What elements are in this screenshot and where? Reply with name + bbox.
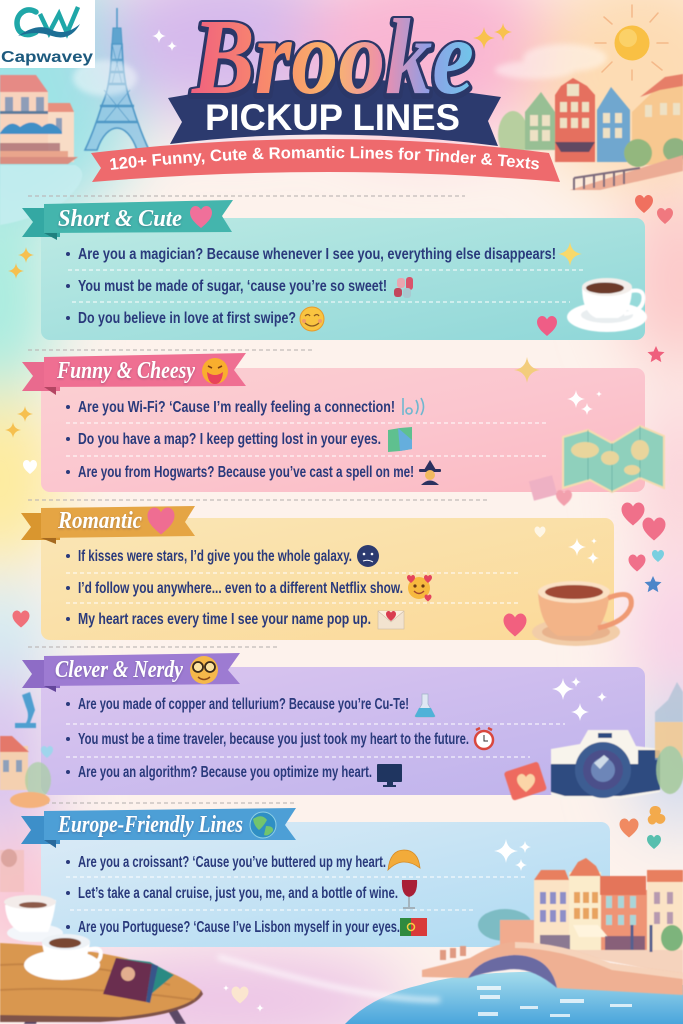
line 3 — [66, 919, 400, 936]
panel: Funny & Cheesy — [22, 353, 645, 492]
icon: sparkles on funny panel — [567, 390, 602, 415]
ribbon: Short & Cute — [22, 200, 233, 240]
title banner: Pickup Lines — [168, 78, 501, 146]
sparkles: romantic panel — [534, 526, 599, 564]
icon: candy — [394, 277, 413, 298]
icon: monitor — [377, 764, 402, 787]
line 1: Are you a croissant? ‘Cause you’ve buttered up my heart. — [78, 854, 386, 871]
icon: small map — [388, 427, 412, 452]
icon: Portugal flag — [400, 918, 427, 936]
line 2: Let’s take a canal cruise, just you, me, and a bottle of wine. — [78, 885, 398, 902]
ribbon: Romantic: Romantic — [57, 508, 142, 534]
line 3 — [66, 764, 372, 781]
decorative hearts and stars on the right edge — [514, 195, 673, 849]
line 1: Are you Wi-Fi? ‘Cause I’m really feeling a connection! — [78, 399, 395, 416]
panel: Romantic — [21, 506, 614, 640]
scenery: stone bridge — [422, 942, 683, 995]
header scenery: pier — [570, 155, 683, 190]
title: Brooke: Brooke — [191, 0, 474, 117]
decorative sparkles and hearts on the left edge — [5, 247, 37, 628]
icon: nerd face — [190, 656, 218, 684]
icon: tea cup on saucer — [532, 581, 631, 646]
icon: sparkles — [558, 242, 582, 266]
header scenery: left building — [0, 75, 82, 225]
panel: Short & Cute — [22, 200, 645, 340]
title banner: Pickup Lines: PICKUP LINES — [205, 97, 460, 138]
scenery: left village and microscope — [0, 692, 53, 892]
icon: sun — [595, 5, 668, 80]
subtitle ribbon — [91, 139, 560, 182]
icon: flask — [415, 694, 435, 717]
icon: face with hearts — [407, 575, 432, 602]
icon: wine glass — [402, 880, 417, 908]
logo: Capwavey — [1, 49, 93, 66]
ribbon: Europe-Friendly Lines: Europe-Friendly Lines — [57, 812, 243, 838]
header scenery: clouds — [73, 44, 607, 96]
logo — [0, 0, 95, 68]
icon: heart photo card — [504, 761, 547, 801]
icon: camera — [551, 730, 660, 799]
line 1 — [66, 854, 386, 871]
line 1: If kisses were stars, I’d give you the whole galaxy. — [78, 548, 352, 565]
line 1 — [66, 696, 409, 713]
icon: cups, passport and café table — [0, 895, 203, 1024]
ribbon: Funny & Cheesy — [22, 353, 246, 395]
icon: folded map — [563, 426, 664, 492]
icon: Eiffel tower — [85, 8, 149, 150]
icon: globe — [250, 812, 276, 838]
line 2: You must be made of sugar, ‘cause you’re so sweet! — [78, 278, 387, 295]
scenery: water — [218, 957, 683, 1024]
line 3: Are you an algorithm? Because you optimize my heart. — [78, 764, 372, 781]
line 2: I’d follow you anywhere... even to a different Netflix show. — [78, 580, 403, 597]
header scenery: colourful houses — [498, 74, 683, 167]
icon: heart — [537, 316, 557, 336]
icon: coffee cup on saucer — [567, 278, 647, 332]
scenery: right village by nerdy panel — [655, 682, 683, 794]
line 3: Are you from Hogwarts? Because you’ve cast a spell on me! — [78, 464, 414, 481]
line 3: Are you Portuguese? ‘Cause I’ve Lisbon myself in your eyes. — [78, 919, 400, 936]
line 1: Are you made of copper and tellurium? Because you’re Cu-Te! — [78, 696, 409, 713]
line 1: Are you a magician? Because whenever I see you, everything else disappears! — [78, 246, 556, 263]
ribbon: Romantic — [21, 506, 195, 544]
ribbon: Clever & Nerdy — [22, 653, 240, 692]
line 2: You must be a time traveler, because you just took my heart to the future. — [78, 731, 469, 748]
line 2 — [66, 885, 398, 902]
icon: postcards and heart — [529, 475, 572, 506]
panel: Clever & Nerdy — [22, 653, 645, 795]
sparkles: header — [152, 23, 512, 116]
sparkles: nerdy panel — [552, 677, 607, 721]
subtitle ribbon: 120+ Funny, Cute & Romantic Lines for Tinder & Texts — [110, 146, 539, 170]
icon: love letter — [378, 611, 404, 629]
ribbon: Europe-Friendly Lines — [21, 808, 296, 848]
icon: wifi signal — [403, 398, 424, 415]
ribbon: Clever & Nerdy: Clever & Nerdy — [55, 657, 183, 683]
icon: navy face — [357, 545, 379, 567]
panel: Europe-Friendly Lines — [21, 808, 610, 947]
decorative heart on the bottom — [223, 985, 264, 1012]
scenery: europe town — [478, 858, 683, 978]
ribbon: Short & Cute: Short & Cute — [58, 206, 182, 232]
sparkles: europe panel — [494, 839, 531, 871]
line 3: Do you believe in love at first swipe? — [78, 310, 296, 327]
icon: hearts beside cup — [504, 614, 526, 636]
section dividers — [28, 196, 488, 803]
icon: croissant — [388, 850, 420, 870]
line 3: My heart races every time I see your name pop up. — [78, 611, 371, 628]
line 2 — [66, 731, 469, 748]
title: Brooke: Brooke — [191, 0, 474, 119]
icon: tongue-out face — [202, 358, 228, 384]
icon: smiling face — [300, 307, 324, 331]
icon: wizard — [419, 460, 441, 485]
line 2: Do you have a map? I keep getting lost in your eyes. — [78, 431, 381, 448]
ribbon: Funny & Cheesy: Funny & Cheesy — [56, 358, 195, 384]
icon: alarm clock — [475, 728, 493, 749]
